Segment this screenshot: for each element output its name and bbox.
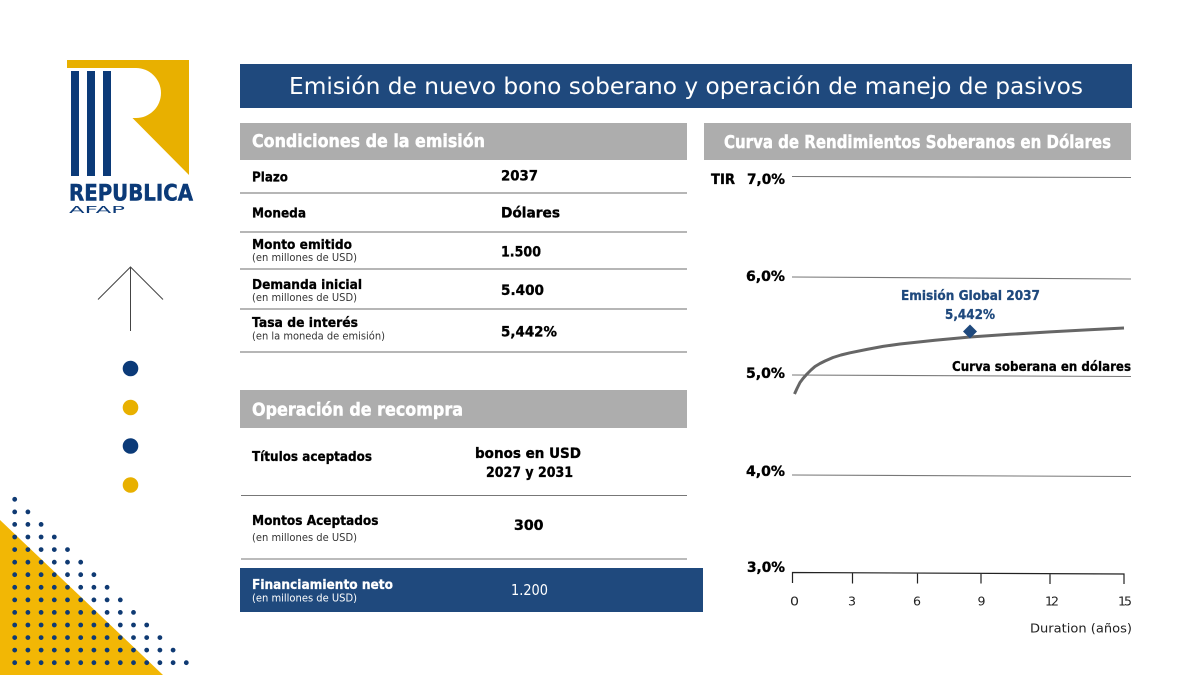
row: monto emitido: (en millones de USD) bbox=[252, 252, 357, 264]
callout: emisión global 2037: Emisión Global 2037 bbox=[901, 289, 1040, 304]
logo mark: gold R bbox=[67, 60, 189, 175]
y axis labels: 6,0% bbox=[746, 269, 785, 285]
y axis labels: 5,0% bbox=[746, 366, 785, 382]
row: títulos aceptados: bonos en USD bbox=[475, 446, 581, 462]
row: tasa de interés: (en la moneda de emisión) bbox=[252, 330, 385, 342]
row: plazo bbox=[252, 168, 538, 186]
heading: condiciones bbox=[240, 123, 687, 160]
heading: recompra bbox=[240, 390, 687, 428]
x axis title: Duration (años) bbox=[1030, 620, 1132, 636]
callout: emisión global 2037: 5,442% bbox=[945, 308, 995, 323]
row: demanda inicial: Demanda inicial bbox=[252, 278, 362, 293]
row: montos aceptados: Montos Aceptados bbox=[252, 514, 379, 529]
x axis labels: 0 bbox=[790, 594, 799, 608]
row: plazo: 2037 bbox=[501, 168, 538, 184]
row dividers bbox=[241, 496, 687, 559]
row: montos aceptados: (en millones de USD) bbox=[252, 532, 357, 544]
row: demanda inicial: 5.400 bbox=[501, 283, 544, 299]
row: monto emitido: Monto emitido bbox=[252, 238, 352, 253]
heading: condiciones: Condiciones de la emisión bbox=[252, 132, 485, 152]
logo sub-wordmark: AFAP bbox=[69, 205, 125, 216]
y axis labels: TIR bbox=[711, 172, 735, 188]
row: montos aceptados: 300 bbox=[514, 518, 544, 534]
x axis bbox=[792, 572, 1124, 584]
decorative corner: yellow triangle and dots bbox=[0, 499, 187, 675]
marker: emisión 2037 bbox=[963, 324, 977, 338]
logo: Republica AFAP bbox=[67, 60, 193, 216]
panel: operación de recompra bbox=[240, 390, 703, 612]
heading: curva: Curva de Rendimientos Soberanos en Dólares bbox=[724, 133, 1111, 153]
y axis labels: 7,0% bbox=[747, 172, 785, 188]
panel: condiciones de la emisión bbox=[240, 123, 687, 352]
row: tasa de interés: 5,442% bbox=[501, 324, 557, 340]
yield curve line bbox=[794, 328, 1124, 394]
panel: curva de rendimientos bbox=[704, 123, 1132, 636]
row: monto emitido: 1.500 bbox=[501, 244, 541, 260]
decorative dots column bbox=[123, 361, 138, 493]
logo mark: columns bbox=[71, 71, 111, 176]
y axis labels: 3,0% bbox=[747, 560, 785, 576]
row: montos aceptados bbox=[252, 514, 544, 544]
row: títulos aceptados: Títulos aceptados bbox=[252, 450, 372, 465]
x axis labels: 12 bbox=[1045, 594, 1059, 608]
y axis labels bbox=[711, 172, 785, 576]
y axis labels: 4,0% bbox=[746, 464, 785, 480]
row: tasa de interés bbox=[252, 316, 557, 342]
x axis labels bbox=[790, 594, 1132, 608]
chart: yield curve bbox=[711, 172, 1132, 636]
row: plazo: Plazo bbox=[252, 170, 288, 186]
gridlines bbox=[792, 176, 1131, 476]
icon: up arrow bbox=[98, 267, 163, 331]
row: financiamiento neto: (en millones de USD) bbox=[252, 592, 357, 604]
label: curva soberana: Curva soberana en dólares bbox=[952, 360, 1131, 375]
row dividers bbox=[240, 193, 687, 352]
title banner bbox=[240, 64, 1132, 108]
logo wordmark: REPUBLICA bbox=[69, 182, 193, 206]
row: títulos aceptados: 2027 y 2031 bbox=[486, 465, 573, 481]
x axis labels: 3 bbox=[848, 594, 856, 608]
x axis labels: 9 bbox=[978, 594, 986, 608]
row: moneda: Moneda bbox=[252, 206, 306, 222]
heading: curva bbox=[704, 123, 1131, 160]
x axis labels: 15 bbox=[1118, 594, 1132, 608]
row: financiamiento neto: Financiamiento neto bbox=[252, 578, 393, 593]
row: monto emitido bbox=[252, 238, 541, 264]
row: moneda bbox=[252, 206, 560, 222]
row: demanda inicial bbox=[252, 278, 544, 304]
row: moneda: Dólares bbox=[501, 206, 560, 222]
heading: recompra: Operación de recompra bbox=[252, 400, 463, 420]
row: demanda inicial: (en millones de USD) bbox=[252, 292, 357, 304]
row: financiamiento neto bbox=[240, 568, 703, 612]
row: títulos aceptados bbox=[252, 446, 581, 481]
row: tasa de interés: Tasa de interés bbox=[252, 316, 358, 331]
callout: emisión global 2037 bbox=[901, 289, 1040, 323]
x axis labels: 6 bbox=[913, 594, 921, 608]
row: financiamiento neto: 1.200 bbox=[511, 581, 548, 599]
title banner: Emisión de nuevo bono soberano y operación de manejo de pasivos bbox=[289, 74, 1083, 100]
